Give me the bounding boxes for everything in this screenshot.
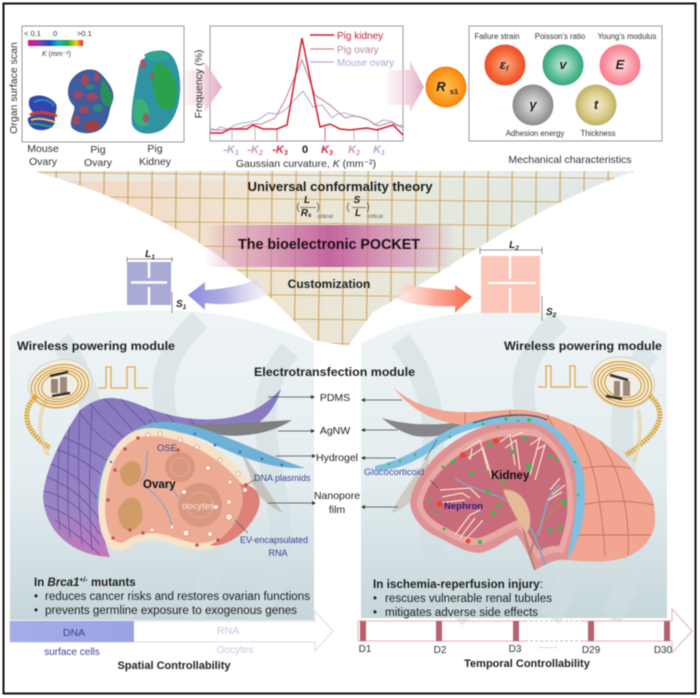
curvature tick labels: K <box>373 144 381 156</box>
curvature tick labels: 1 <box>381 150 385 157</box>
ovary labels: OSE <box>157 443 177 454</box>
parameter circles: γ <box>529 97 537 112</box>
text block: ischemia outcomes: In ischemia-reperfusion injury: <box>373 579 543 591</box>
heading: wireless powering right: Wireless powering module <box>504 341 662 353</box>
L2 dimension <box>480 247 542 254</box>
callouts: layer names with arrows: Hydrogel <box>316 452 358 464</box>
Rs1 circle <box>426 66 466 108</box>
hydrogel blue layer <box>375 417 585 561</box>
parameter circles <box>484 44 640 126</box>
parameter names: Thickness <box>580 129 616 138</box>
cells <box>146 432 247 536</box>
decorative helix watermark <box>60 320 650 620</box>
kidney outer PDMS layer <box>393 387 655 562</box>
critical ratio formulas: ) <box>366 202 370 213</box>
organ names <box>27 143 172 169</box>
kidney labels: Nephron <box>444 501 483 512</box>
curvature tick labels: K <box>321 144 329 156</box>
parameter circles: t <box>594 97 599 112</box>
curvature tick labels: 2 <box>355 150 360 157</box>
colour scale legend: K (mm⁻²) <box>42 51 71 58</box>
ovary labels: Ovary <box>143 479 176 491</box>
chart x axis title: Gaussian curvature, K (mm⁻²) <box>236 158 376 170</box>
callouts: layer names with arrows: AgNW <box>320 425 350 437</box>
Rs1 circle: R <box>436 79 446 94</box>
panel: mechanical characteristics <box>469 26 662 141</box>
callouts: layer names with arrows: PDMS <box>320 392 350 404</box>
spatial controllability arrow: Oocytes <box>217 645 253 656</box>
S2 dimension <box>541 296 543 321</box>
panel: organ surface scan <box>22 26 184 142</box>
text block: ischemia outcomes: • <box>373 607 377 619</box>
spatial controllability caption: Spatial Controllability <box>117 660 231 672</box>
critical ratio formulas: ( <box>346 202 350 213</box>
curvature tick labels: -K <box>247 144 259 156</box>
callouts: layer names with arrows <box>268 392 402 516</box>
ovary labels: oocytes <box>182 501 215 512</box>
organ names: Pig <box>90 144 106 156</box>
text block: Brca1 outcomes <box>34 577 310 617</box>
pocket pattern large: 2 <box>552 312 557 319</box>
text block: Brca1 outcomes: • <box>34 591 38 603</box>
critical ratio formulas: s <box>308 213 312 219</box>
ovary labels: EV-encapsulated <box>240 535 308 545</box>
parameter circles: E <box>616 57 625 72</box>
curvature tick labels: -K <box>272 144 284 156</box>
icon: right wireless coil <box>587 351 660 462</box>
organ names: Kidney <box>139 156 172 168</box>
pocket pattern large <box>480 240 557 321</box>
curvature tick labels: -K <box>223 144 235 156</box>
ovary labels: DNA plasmids <box>254 473 311 483</box>
arrow: customization right <box>390 283 472 313</box>
parameter circles: v <box>559 57 567 72</box>
critical ratio formulas: R <box>301 208 308 219</box>
text block: Brca1 outcomes: prevents germline exposure to exogenous genes <box>45 605 297 617</box>
critical ratio formulas: critical <box>367 214 383 220</box>
universal conformality fan with mesh <box>30 170 640 350</box>
day labels: D1 <box>359 644 372 655</box>
day labels: ······· <box>539 643 557 652</box>
icon: left pulse wave <box>98 367 148 388</box>
pig kidney curve <box>210 38 403 135</box>
spatial controllability arrow: DNA <box>63 627 85 639</box>
mouse ovary curve <box>210 91 403 130</box>
pig kidney scan <box>132 51 180 134</box>
curvature tick labels <box>223 144 385 157</box>
day labels: D2 <box>434 645 447 656</box>
colour scale legend: < 0.1 <box>24 29 41 38</box>
critical ratio formulas <box>296 195 383 220</box>
organ surface scan axis label: Organ surface scan <box>8 42 20 134</box>
curvature tick labels: K <box>348 144 356 156</box>
curvature tick labels: 1 <box>235 150 239 157</box>
AgNW layer <box>382 418 480 437</box>
pocket pattern large: 2 <box>514 245 519 252</box>
parameter names: Young's modulus <box>598 32 657 41</box>
curvature tick labels: 3 <box>284 150 288 157</box>
heading: wireless powering left: Wireless powering module <box>17 341 175 353</box>
critical ratio formulas: critical <box>317 214 333 220</box>
text block: ischemia outcomes: rescues vulnerable renal tubules <box>385 593 552 605</box>
pocket pattern small: L <box>145 249 151 260</box>
organ names: Ovary <box>29 156 58 168</box>
S1 dimension <box>171 292 173 313</box>
pocket pattern large: L <box>509 240 515 251</box>
day ticks <box>360 621 670 641</box>
curvature tick labels: 0 <box>302 144 308 156</box>
organ names: Ovary <box>84 157 113 169</box>
location labels: surface cells <box>44 647 100 658</box>
icon: left wireless coil <box>24 354 96 456</box>
colour scale legend: >0.1 <box>77 29 92 38</box>
parameter names <box>474 32 657 138</box>
colour scale legend <box>24 29 92 58</box>
POCKET pink band <box>205 225 455 267</box>
temporal controllability caption: Temporal Controllability <box>464 658 591 670</box>
Rs1 circle: s1 <box>450 87 458 96</box>
kidney section <box>410 421 581 570</box>
kidney labels: Glucocorticoid <box>364 467 424 478</box>
frequency axis label: Frequency (%) <box>193 50 205 118</box>
callouts: layer names with arrows: film <box>329 504 345 516</box>
text block: ischemia outcomes <box>373 579 552 619</box>
mechanical characteristics caption: Mechanical characteristics <box>508 154 632 166</box>
theory heading: Universal conformality theory <box>248 180 433 194</box>
nanopore film <box>391 455 430 513</box>
illustration: ovary with POCKET <box>40 389 311 558</box>
ovary tissue <box>98 428 259 551</box>
follicles <box>165 452 222 527</box>
purple PDMS layer <box>43 389 281 557</box>
DNA segment <box>10 621 134 642</box>
pig ovary curve <box>210 60 403 130</box>
chart legend: Pig kidney <box>337 31 383 42</box>
text block: Brca1 outcomes: In Brca1 <box>34 577 79 589</box>
parameter circles: f <box>506 66 509 73</box>
day labels: D30 <box>654 645 673 656</box>
callouts: layer names with arrows: Nanopore <box>314 490 360 502</box>
colour scale legend: 0 <box>53 29 57 38</box>
pocket pattern small <box>127 249 187 313</box>
lower panel: left background <box>10 311 314 620</box>
heading: electrotransfection: Electrotransfection module <box>254 367 415 379</box>
day labels <box>359 643 673 656</box>
central vessels <box>455 470 565 570</box>
text block: Brca1 outcomes: mutants <box>88 577 136 589</box>
kidney labels: Kidney <box>491 470 530 482</box>
icon: right pulse wave <box>538 366 588 387</box>
pig ovary scan <box>68 69 113 133</box>
lower panel: right background <box>361 312 667 618</box>
nanopore film <box>240 450 283 513</box>
L1 dimension <box>127 257 172 262</box>
critical ratio formulas: L <box>304 195 310 206</box>
coil cable <box>626 396 660 455</box>
chart legend: Pig ovary <box>337 45 379 56</box>
curvature tick labels: 2 <box>258 150 263 157</box>
parameter circles: ε <box>500 57 506 72</box>
parameter names: Adhesion energy <box>506 129 564 138</box>
RNA segment: RNA <box>217 625 239 637</box>
critical ratio formulas: L <box>355 208 361 219</box>
organ names: Mouse <box>27 143 59 155</box>
text block: ischemia outcomes: • <box>373 593 377 605</box>
text block: Brca1 outcomes: reduces cancer risks and restores ovarian functions <box>45 591 310 603</box>
critical ratio formulas: ) <box>316 202 320 213</box>
chart legend: Mouse ovary <box>337 58 394 69</box>
organ names: Pig <box>147 143 163 155</box>
pocket pattern large: S <box>546 307 553 318</box>
customization label: Customization <box>288 277 370 291</box>
temporal controllability arrow <box>358 609 692 656</box>
pocket pattern small: 1 <box>183 304 187 311</box>
AgNW layer <box>187 420 292 436</box>
vessels <box>140 450 178 525</box>
mouse ovary scan <box>28 96 57 130</box>
arrow: chart to Rs1 <box>388 61 424 112</box>
text block: Brca1 outcomes: +/- <box>79 577 88 584</box>
pocket pattern small: 1 <box>151 254 155 261</box>
chart legend <box>310 31 394 69</box>
kidney labels <box>364 467 530 512</box>
arrow: customization left <box>188 279 268 310</box>
nephrons <box>440 432 565 540</box>
pocket pattern small: S <box>176 299 183 310</box>
spatial controllability arrow <box>10 611 333 658</box>
POCKET title: The bioelectronic POCKET <box>238 237 420 253</box>
parameter names: Failure strain <box>474 32 520 41</box>
text block: Brca1 outcomes: • <box>34 605 38 617</box>
critical ratio formulas: S <box>354 195 361 206</box>
text block: ischemia outcomes: mitigates adverse side effects <box>385 607 538 619</box>
ovary labels <box>143 443 311 558</box>
day labels: D29 <box>582 645 601 656</box>
panel: curvature frequency chart <box>210 26 403 141</box>
ovary labels: RNA <box>268 548 288 558</box>
K drop lines <box>232 125 378 141</box>
critical ratio formulas: ( <box>296 202 300 213</box>
parameter names: Poisson's ratio <box>535 32 586 41</box>
hydrogel layer <box>97 422 305 510</box>
coil cable <box>27 396 50 448</box>
curvature tick labels: 3 <box>329 150 333 157</box>
green glucocorticoid particles <box>388 417 579 544</box>
day labels: D3 <box>509 644 522 655</box>
illustration: kidney with POCKET <box>364 387 655 570</box>
arrow: scan to chart <box>185 62 222 112</box>
